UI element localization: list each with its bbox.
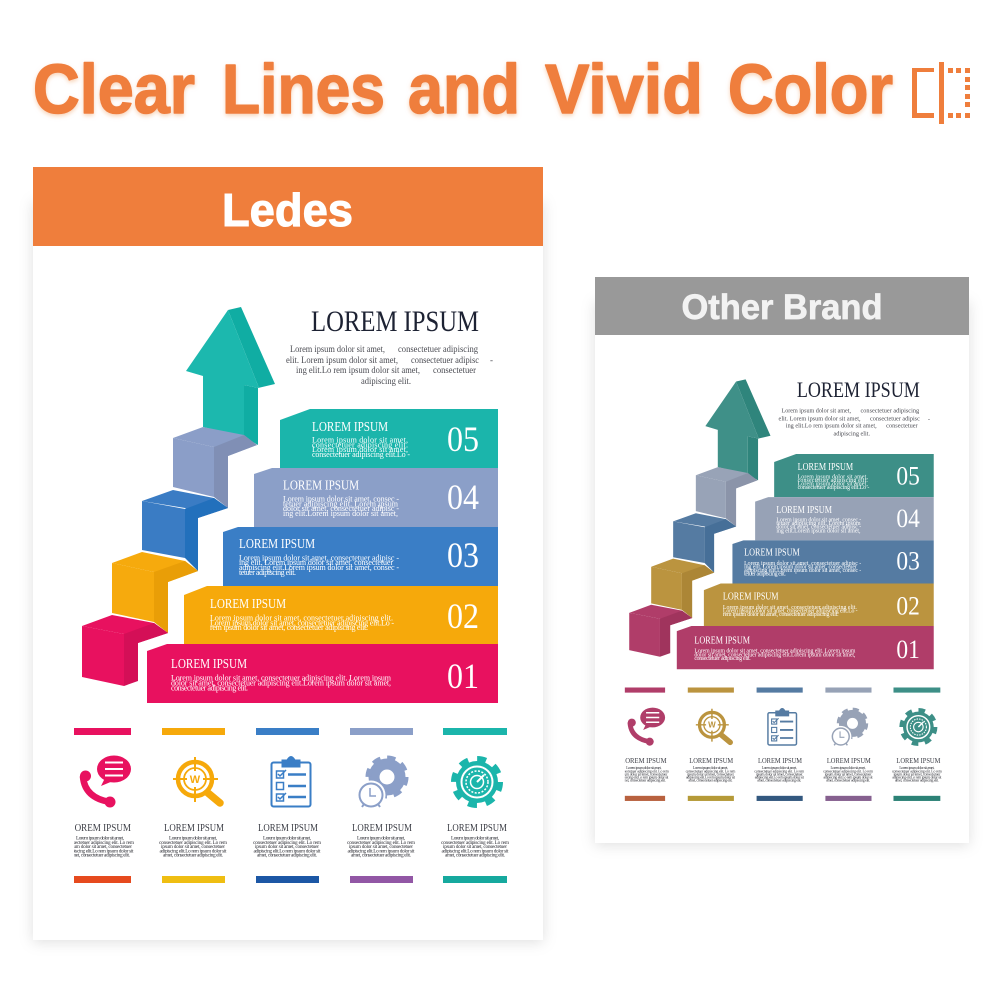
band 02: LOREM IPSUM xyxy=(210,597,286,612)
title: Color xyxy=(728,50,893,128)
column 5: gauge gear: adipiscing elit.Lo rem ipsum dolor sit xyxy=(442,848,509,854)
text block: main heading and intro: adipiscing elit. xyxy=(833,431,870,438)
band 04: LOREM IPSUM xyxy=(776,505,832,516)
icon: clipboard checklist xyxy=(768,708,796,745)
text block: main heading and intro: consectetuer xyxy=(433,365,476,375)
band 02: Lorem ipsum dolor sit amet, consectetuer adipiscing elit.Lo - xyxy=(210,618,394,628)
band 02 xyxy=(184,586,498,644)
chart: arrow and stairs xyxy=(82,307,275,686)
band 04: dolor sit amet, consectetuer adipisc - xyxy=(283,504,399,513)
band 02 xyxy=(704,584,934,626)
column 5: gauge gear: LOREM IPSUM xyxy=(447,823,507,834)
column 1: phone: amet, consectetuer adipiscing elit. xyxy=(70,853,130,859)
column 3: checklist: adipiscing elit.Lo rem ipsum dolor sit xyxy=(254,848,321,854)
text block: main heading and intro: consectetuer adipiscing xyxy=(861,407,920,414)
band 05: Lorem ipsum dolor sit amet, xyxy=(312,445,408,454)
band 05: Lorem ipsum dolor sit amet, xyxy=(798,481,868,487)
step 1 xyxy=(629,605,692,657)
column 4: gear and clock: Lorem ipsum dolor sit amet, xyxy=(357,836,405,842)
band 04 xyxy=(254,468,498,527)
column 4: gear and clock: ipsum dolor sit amet, consectetuer xyxy=(825,772,872,777)
column 3: checklist: adipiscing elit.Lo rem ipsum dolor sit xyxy=(755,775,805,779)
band 01: consectetuer adipiscing elit. xyxy=(171,684,248,692)
text block: main heading and intro xyxy=(779,377,930,438)
band 03: LOREM IPSUM xyxy=(239,537,315,552)
column 3: checklist: LOREM IPSUM xyxy=(258,823,318,834)
text block: main heading and intro: LOREM IPSUM xyxy=(797,377,920,402)
band 03: adipiscing elit.Lorem ipsum dolor sit amet, consec - xyxy=(744,568,861,574)
column 5: gauge gear xyxy=(441,728,510,883)
column 4: gear and clock: ipsum dolor sit amet, consectetuer xyxy=(349,844,413,850)
text block: main heading and intro: consectetuer adipisc xyxy=(411,355,479,365)
column 3: checklist xyxy=(754,687,805,801)
arrow xyxy=(705,379,770,480)
column 1: phone: LOREM IPSUM xyxy=(69,823,131,834)
text block: main heading and intro: adipiscing elit. xyxy=(361,376,411,386)
column 1: phone: ipsum dolor sit amet, consectetuer xyxy=(620,772,668,777)
band 04 xyxy=(755,497,934,540)
column 3: checklist: Lorem ipsum dolor sit amet, xyxy=(263,836,311,842)
column 5: gauge gear: ipsum dolor sit amet, consectetuer xyxy=(893,772,941,777)
column 2: target: LOREM IPSUM xyxy=(689,756,734,765)
band 05: consectetuer adipiscing elit. xyxy=(312,440,408,449)
column 3: checklist: LOREM IPSUM xyxy=(758,756,802,765)
column 3: checklist: consectetuer adipiscing elit. Lo rem xyxy=(754,769,804,773)
text block: main heading and intro: Lorem ipsum dolor sit amet, xyxy=(290,344,385,354)
column 4: gear and clock: amet, consectetuer adipiscing elit. xyxy=(351,853,411,859)
column 1: phone: Lorem ipsum dolor sit amet, xyxy=(626,766,662,771)
column 2: target: consectetuer adipiscing elit. Lo rem xyxy=(686,769,735,773)
column 2: target: ipsum dolor sit amet, consectetuer xyxy=(687,772,735,777)
step 1 xyxy=(82,615,168,686)
band 03: Lorem ipsum dolor sit amet, consectetuer adipisc - xyxy=(744,561,861,567)
band 01: 01 xyxy=(896,635,920,664)
band 02: LOREM IPSUM xyxy=(723,592,779,603)
band 03: ing elit. Lorem ipsum dolor sit amet, consectetuer xyxy=(744,564,857,570)
icon: gauge gear xyxy=(902,710,935,744)
column 5: gauge gear: ipsum dolor sit amet, consectetuer xyxy=(443,844,507,850)
column 2: target xyxy=(686,687,736,801)
band 02: rem ipsum dolor sit amet, consectetuer adipiscing elit. xyxy=(210,623,368,632)
column 4: gear and clock: LOREM IPSUM xyxy=(827,756,871,765)
band 01: dolor sit amet, consectetuer adipiscing elit.Lorem ipsum dolor sit amet, xyxy=(694,652,856,658)
icon: phone with speech bubble xyxy=(80,756,131,808)
column 1: phone: ipsum dolor sit amet, consectetuer xyxy=(68,844,132,850)
text block: main heading and intro: elit. Lorem ipsum dolor sit amet, xyxy=(286,355,398,365)
band 01 xyxy=(147,644,498,703)
band 02: 02 xyxy=(896,591,920,620)
column 5: gauge gear: consectetuer adipiscing elit. Lo rem xyxy=(441,840,510,846)
column 2: target: consectetuer adipiscing elit. Lo rem xyxy=(159,840,228,846)
text block: main heading and intro: LOREM IPSUM xyxy=(311,305,479,338)
band 05 xyxy=(774,454,934,497)
band 04: Lorem ipsum dolor sit amet, consec - xyxy=(776,518,861,524)
band 01: Lorem ipsum dolor sit amet, consectetuer adipiscing elit. Lorem ipsum xyxy=(694,649,856,655)
band 04: 04 xyxy=(447,477,479,517)
text block: main heading and intro: elit. Lorem ipsum dolor sit amet, xyxy=(779,415,861,422)
band 03: adipiscing elit.Lorem ipsum dolor sit amet, consec - xyxy=(239,563,399,572)
panel: Other Brand poster xyxy=(595,277,969,843)
band 04: dolor sit amet, consectetuer adipisc - xyxy=(776,525,861,531)
icon: magnifier target xyxy=(173,757,220,803)
heading: Ledes xyxy=(33,167,543,246)
column 1: phone: LOREM IPSUM xyxy=(621,756,667,765)
band 05: Lorem ipsum dolor sit amet, xyxy=(798,475,868,481)
band 02: 02 xyxy=(447,596,479,636)
title: Vivid xyxy=(545,50,703,128)
icon: magnifier target: W xyxy=(708,721,716,730)
step 2 xyxy=(651,559,714,618)
band 05: LOREM IPSUM xyxy=(798,462,853,473)
column 1: phone: adipiscing elit.Lo rem ipsum dolor sit xyxy=(66,848,134,854)
band 03: tetuer adipiscing elit. xyxy=(744,572,786,578)
text block: main heading and intro: ing elit.Lo rem ipsum dolor sit amet, xyxy=(786,423,877,430)
band 01: 01 xyxy=(447,656,479,696)
column 5: gauge gear: Lorem ipsum dolor sit amet, xyxy=(451,836,499,842)
column 3: checklist: Lorem ipsum dolor sit amet, xyxy=(762,766,797,771)
band 04: 04 xyxy=(896,504,920,533)
arrow xyxy=(186,307,275,445)
band 01: dolor sit amet, consectetuer adipiscing elit.Lorem ipsum dolor sit amet, xyxy=(171,678,391,688)
step 3 xyxy=(142,490,228,571)
band 03: ing elit. Lorem ipsum dolor sit amet, consectetuer xyxy=(239,558,393,567)
band 01: LOREM IPSUM xyxy=(694,636,750,647)
column 4: gear and clock: Lorem ipsum dolor sit amet, xyxy=(831,766,866,771)
band 05: Lorem ipsum dolor sit amet, xyxy=(312,436,408,444)
column 4: gear and clock: amet, consectetuer adipiscing elit. xyxy=(826,779,870,784)
column 5: gauge gear: consectetuer adipiscing elit. Lo rem xyxy=(892,769,942,773)
text block: main heading and intro xyxy=(286,305,493,386)
column 5: gauge gear: Lorem ipsum dolor sit amet, xyxy=(899,766,935,771)
column 3: checklist: ipsum dolor sit amet, consectetuer xyxy=(255,844,319,850)
column 3: checklist: amet, consectetuer adipiscing elit. xyxy=(757,779,801,784)
band 02: Lorem ipsum dolor sit amet, consectetuer adipiscing elit. xyxy=(723,605,857,611)
band 03: 03 xyxy=(896,547,920,576)
band 01 xyxy=(677,626,934,669)
text block: main heading and intro: - xyxy=(490,355,493,365)
column 5: gauge gear: adipiscing elit.Lo rem ipsum dolor sit xyxy=(892,775,942,779)
column 4: gear and clock xyxy=(823,687,874,801)
column 4: gear and clock: consectetuer adipiscing elit. Lo rem xyxy=(347,840,416,846)
column 3: checklist: ipsum dolor sit amet, consectetuer xyxy=(756,772,803,777)
text block: main heading and intro: consectetuer adipisc xyxy=(870,415,920,422)
column 4: gear and clock: consectetuer adipiscing elit. Lo rem xyxy=(823,769,873,773)
column 2: target: amet, consectetuer adipiscing elit. xyxy=(689,779,733,784)
column 3: checklist: consectetuer adipiscing elit. Lo rem xyxy=(253,840,322,846)
column 1: phone xyxy=(74,728,134,883)
band 03: Lorem ipsum dolor sit amet, consectetuer adipisc - xyxy=(239,554,399,562)
title: Lines xyxy=(222,50,385,128)
heading: Ledes: Ledes xyxy=(222,184,353,236)
step 4 xyxy=(173,427,257,508)
text block: main heading and intro: consectetuer xyxy=(886,423,918,430)
band 02: Lorem ipsum dolor sit amet, consectetuer adipiscing elit.Lo - xyxy=(723,608,858,614)
band 01: LOREM IPSUM xyxy=(171,657,247,672)
column 2: target xyxy=(159,728,228,883)
step 3 xyxy=(673,513,736,573)
band 05: consectetuer adipiscing elit. xyxy=(798,478,868,484)
column 5: gauge gear: LOREM IPSUM xyxy=(896,756,941,765)
icon: gear with clock xyxy=(830,710,866,747)
band 04: ing elit.Lorem ipsum dolor sit amet, xyxy=(776,528,861,534)
icon: gear with clock xyxy=(356,758,406,810)
column 1: phone: adipiscing elit.Lo rem ipsum dolor sit xyxy=(619,775,669,779)
heading: Other Brand: Other Brand xyxy=(682,288,882,327)
text block: main heading and intro: Lorem ipsum dolor sit amet, xyxy=(781,407,851,414)
column 3: checklist xyxy=(253,728,322,883)
band 03: LOREM IPSUM xyxy=(744,548,800,559)
band 05: consectetuer adipiscing elit.Lo - xyxy=(798,485,869,491)
title: and xyxy=(408,50,520,128)
icon: compare frames xyxy=(912,62,970,124)
band 03: 03 xyxy=(447,535,479,575)
column 1: phone: Lorem ipsum dolor sit amet, xyxy=(76,836,124,842)
band 04: tetuer adipiscing elit. Lorem ipsum xyxy=(776,521,861,527)
band 04: LOREM IPSUM xyxy=(283,478,359,494)
column 2: target: Lorem ipsum dolor sit amet, xyxy=(693,766,728,771)
icon: clipboard checklist xyxy=(272,756,310,806)
column 2: target: LOREM IPSUM xyxy=(164,823,224,834)
band 05: 05 xyxy=(896,462,920,491)
text block: main heading and intro: - xyxy=(928,415,930,422)
text block: main heading and intro: ing elit.Lo rem ipsum dolor sit amet, xyxy=(296,365,420,375)
title xyxy=(33,50,893,128)
panel: Ledes poster xyxy=(33,167,543,940)
column 1: phone: amet, consectetuer adipiscing elit. xyxy=(622,779,666,784)
column 2: target: ipsum dolor sit amet, consectetuer xyxy=(161,844,225,850)
chart: arrow and stairs xyxy=(629,379,770,657)
step 2 xyxy=(112,552,198,633)
column 2: target: adipiscing elit.Lo rem ipsum dolor sit xyxy=(686,775,736,779)
heading: Other Brand xyxy=(595,277,969,335)
poster content, muted xyxy=(619,377,942,801)
band 02: rem ipsum dolor sit amet, consectetuer adipiscing elit. xyxy=(723,612,839,618)
column 4: gear and clock: LOREM IPSUM xyxy=(352,823,412,834)
text block: main heading and intro: consectetuer adipiscing xyxy=(398,344,478,354)
band 05: consectetuer adipiscing elit.Lo - xyxy=(312,450,410,459)
column 3: checklist: amet, consectetuer adipiscing elit. xyxy=(257,853,317,859)
band 03 xyxy=(223,527,498,586)
band 02: Lorem ipsum dolor sit amet, consectetuer adipiscing elit. xyxy=(210,614,393,622)
column 2: target: amet, consectetuer adipiscing elit. xyxy=(163,853,223,859)
column 2: target: Lorem ipsum dolor sit amet, xyxy=(169,836,217,842)
column 1: phone: consectetuer adipiscing elit. Lo rem xyxy=(619,769,669,773)
band 03 xyxy=(732,540,934,584)
icon: magnifier target: W xyxy=(190,774,201,786)
column 4: gear and clock xyxy=(347,728,416,883)
band 03: tetuer adipiscing elit. xyxy=(239,568,296,577)
icon: gauge gear xyxy=(454,759,500,805)
band 05 xyxy=(280,409,498,468)
icon: phone with speech bubble xyxy=(628,708,665,746)
column 1: phone: consectetuer adipiscing elit. Lo rem xyxy=(66,840,135,846)
band 05: 05 xyxy=(447,419,479,459)
title: Clear xyxy=(33,50,195,128)
band 04: tetuer adipiscing elit. Lorem ipsum xyxy=(283,499,399,508)
column 2: target: adipiscing elit.Lo rem ipsum dolor sit xyxy=(160,848,227,854)
band 04: ing elit.Lorem ipsum dolor sit amet, xyxy=(283,509,398,518)
column 1: phone xyxy=(624,688,669,801)
column 5: gauge gear xyxy=(892,687,942,801)
column 4: gear and clock: adipiscing elit.Lo rem ipsum dolor sit xyxy=(824,775,874,779)
band 05: LOREM IPSUM xyxy=(312,420,388,435)
band 01: consectetuer adipiscing elit. xyxy=(694,656,751,662)
column 4: gear and clock: adipiscing elit.Lo rem ipsum dolor sit xyxy=(348,848,415,854)
band 04: Lorem ipsum dolor sit amet, consec - xyxy=(283,494,399,504)
column 5: gauge gear: amet, consectetuer adipiscing elit. xyxy=(445,853,505,859)
step 4 xyxy=(696,467,757,526)
band 01: Lorem ipsum dolor sit amet, consectetuer adipiscing elit. Lorem ipsum xyxy=(171,674,392,682)
column 5: gauge gear: amet, consectetuer adipiscing elit. xyxy=(895,779,939,784)
